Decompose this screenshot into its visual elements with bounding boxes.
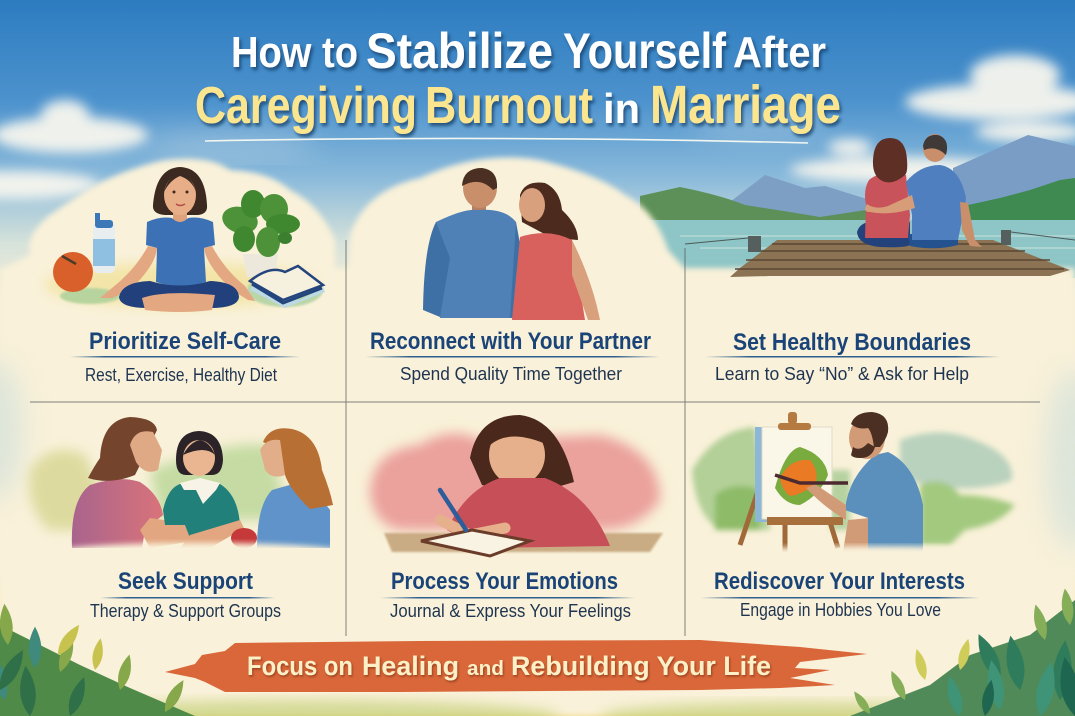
illustration: journaling woman (370, 415, 663, 556)
middle woman (163, 480, 240, 538)
edge tints (0, 360, 1075, 550)
heading: Process Your Emotions (391, 568, 618, 595)
panel: seek support (29, 417, 345, 621)
illustration: meditating woman (45, 167, 325, 312)
heading: Rediscover Your Interests (714, 568, 965, 595)
title: Caregiving (195, 77, 417, 135)
panel: boundaries (705, 329, 1000, 384)
subtext: Rest, Exercise, Healthy Diet (85, 365, 277, 385)
subtext: Engage in Hobbies You Love (740, 600, 941, 620)
sky clouds (0, 55, 1075, 199)
heading underline (380, 597, 635, 598)
subtext: Spend Quality Time Together (400, 364, 622, 384)
title: After (733, 28, 826, 77)
subtext: Journal & Express Your Feelings (390, 601, 631, 621)
icon: water bottle (93, 213, 115, 273)
easel legs (740, 485, 838, 552)
banner: and (467, 658, 504, 680)
icon: book (250, 266, 325, 308)
title: in (603, 85, 640, 132)
title underline (205, 138, 808, 143)
title: Burnout (425, 77, 593, 135)
foliage right (600, 588, 1075, 716)
apple in hand (231, 528, 257, 548)
woman hair back (153, 167, 207, 215)
banner: Rebuilding Your Life (511, 651, 771, 681)
right woman (257, 484, 330, 548)
subtext: Therapy & Support Groups (90, 601, 281, 621)
heading: Prioritize Self-Care (89, 328, 281, 355)
title: Marriage (650, 75, 841, 135)
grid dividers (30, 240, 1040, 636)
title: How to (231, 28, 358, 77)
scene: pier and couple (685, 134, 1075, 277)
banner: Focus on (247, 651, 353, 681)
illustration: support group (29, 417, 345, 561)
couple sitting (857, 134, 982, 248)
title: Yourself (563, 23, 726, 79)
heading: Reconnect with Your Partner (370, 328, 651, 355)
heading: Seek Support (118, 568, 253, 595)
heading underline (100, 597, 275, 598)
illustration: walking couple (423, 168, 600, 320)
heading underline (705, 356, 1000, 358)
left woman (72, 479, 163, 548)
panel: reconnect (365, 168, 660, 384)
icon: plant (219, 190, 300, 277)
heading underline (700, 597, 980, 598)
heading underline (70, 356, 300, 358)
heading: Set Healthy Boundaries (733, 329, 971, 356)
panel: prioritize self-care (45, 167, 325, 385)
panel: process emotions (370, 415, 663, 621)
title (195, 23, 841, 135)
illustration: painter (692, 412, 1030, 560)
panel clouds (0, 157, 1075, 716)
foliage left (0, 603, 560, 716)
heading underline (365, 356, 660, 358)
icon: orange (53, 252, 93, 292)
panel: rediscover interests (692, 412, 1030, 620)
banner (165, 640, 867, 692)
scene: lake and hills (640, 135, 1075, 278)
banner: Healing (362, 651, 459, 681)
subtext: Learn to Say “No” & Ask for Help (715, 364, 969, 384)
title: Stabilize (366, 23, 553, 79)
man (843, 518, 870, 552)
pier (685, 230, 1075, 277)
